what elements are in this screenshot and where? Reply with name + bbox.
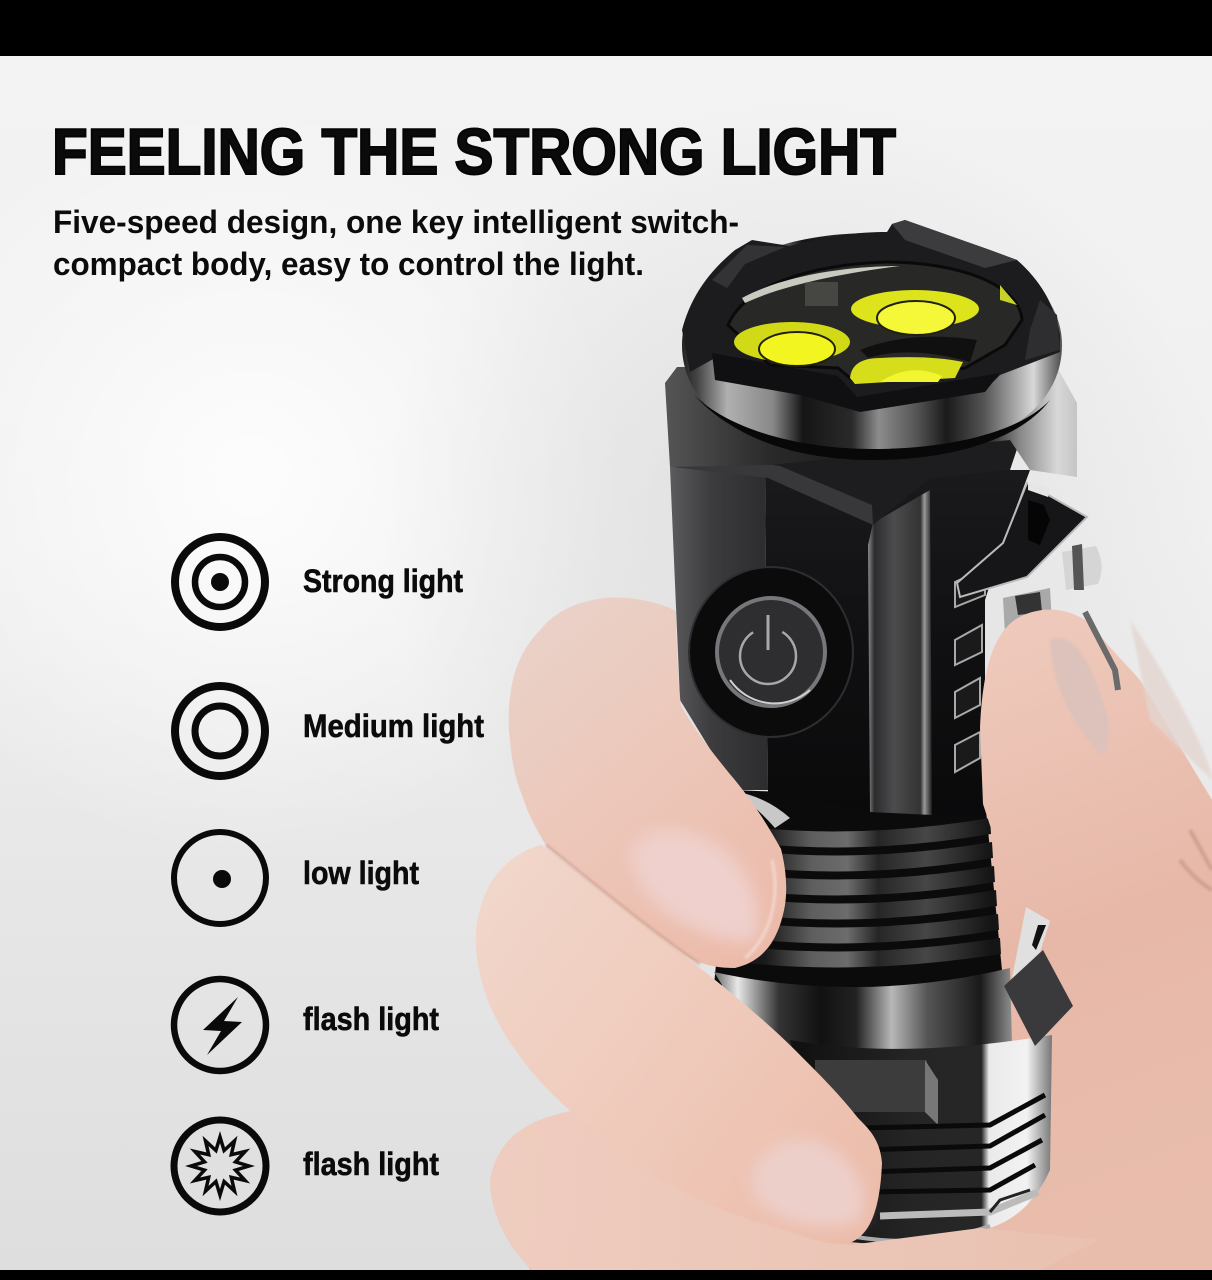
label: medium light: Medium light [303,708,484,744]
clip hook and screws [957,482,1102,635]
flashlight body [670,410,1030,815]
power button [689,567,853,737]
bezel tabs [712,220,1060,412]
hand: middle finger [476,845,882,1244]
icon: strong light [175,537,265,627]
subtitle text: compact body, easy to control the light. [53,246,644,282]
label: strong light: Strong light [303,563,463,599]
label: flash light: flash light [303,1001,439,1037]
flashlight head band [682,233,1062,458]
hand: bottom of palm and ring finger [490,1111,1100,1270]
bottom black bar [0,1270,1212,1280]
flashlight tail [790,1035,1052,1244]
LED emitters [734,290,979,384]
flashlight grip [714,790,1005,1000]
subtitle text [53,204,739,282]
hand: palm behind flashlight [500,620,1212,1270]
subtitle text: Five-speed design, one key intelligent switch- [53,204,739,240]
title: FEELING THE STRONG LIGHT [52,115,896,188]
icon: flash light bolt [174,979,266,1071]
lens [728,262,1022,382]
hand: thumb [980,610,1212,1199]
icon: low light [174,832,266,924]
hand: index finger [509,598,786,968]
icon: flash light burst [174,1120,266,1212]
flashlight head top face [682,220,1060,398]
top black bar [0,0,1212,56]
label: low light: low light [303,855,419,891]
flashlight shoulder [665,367,1077,477]
icon: medium light [175,686,265,776]
flashlight collar ring [714,968,1012,1058]
flashlight [665,220,1102,1244]
label: flash light: flash light [303,1146,439,1182]
flashlight side clip [1004,907,1073,1046]
body side slots [955,568,985,772]
